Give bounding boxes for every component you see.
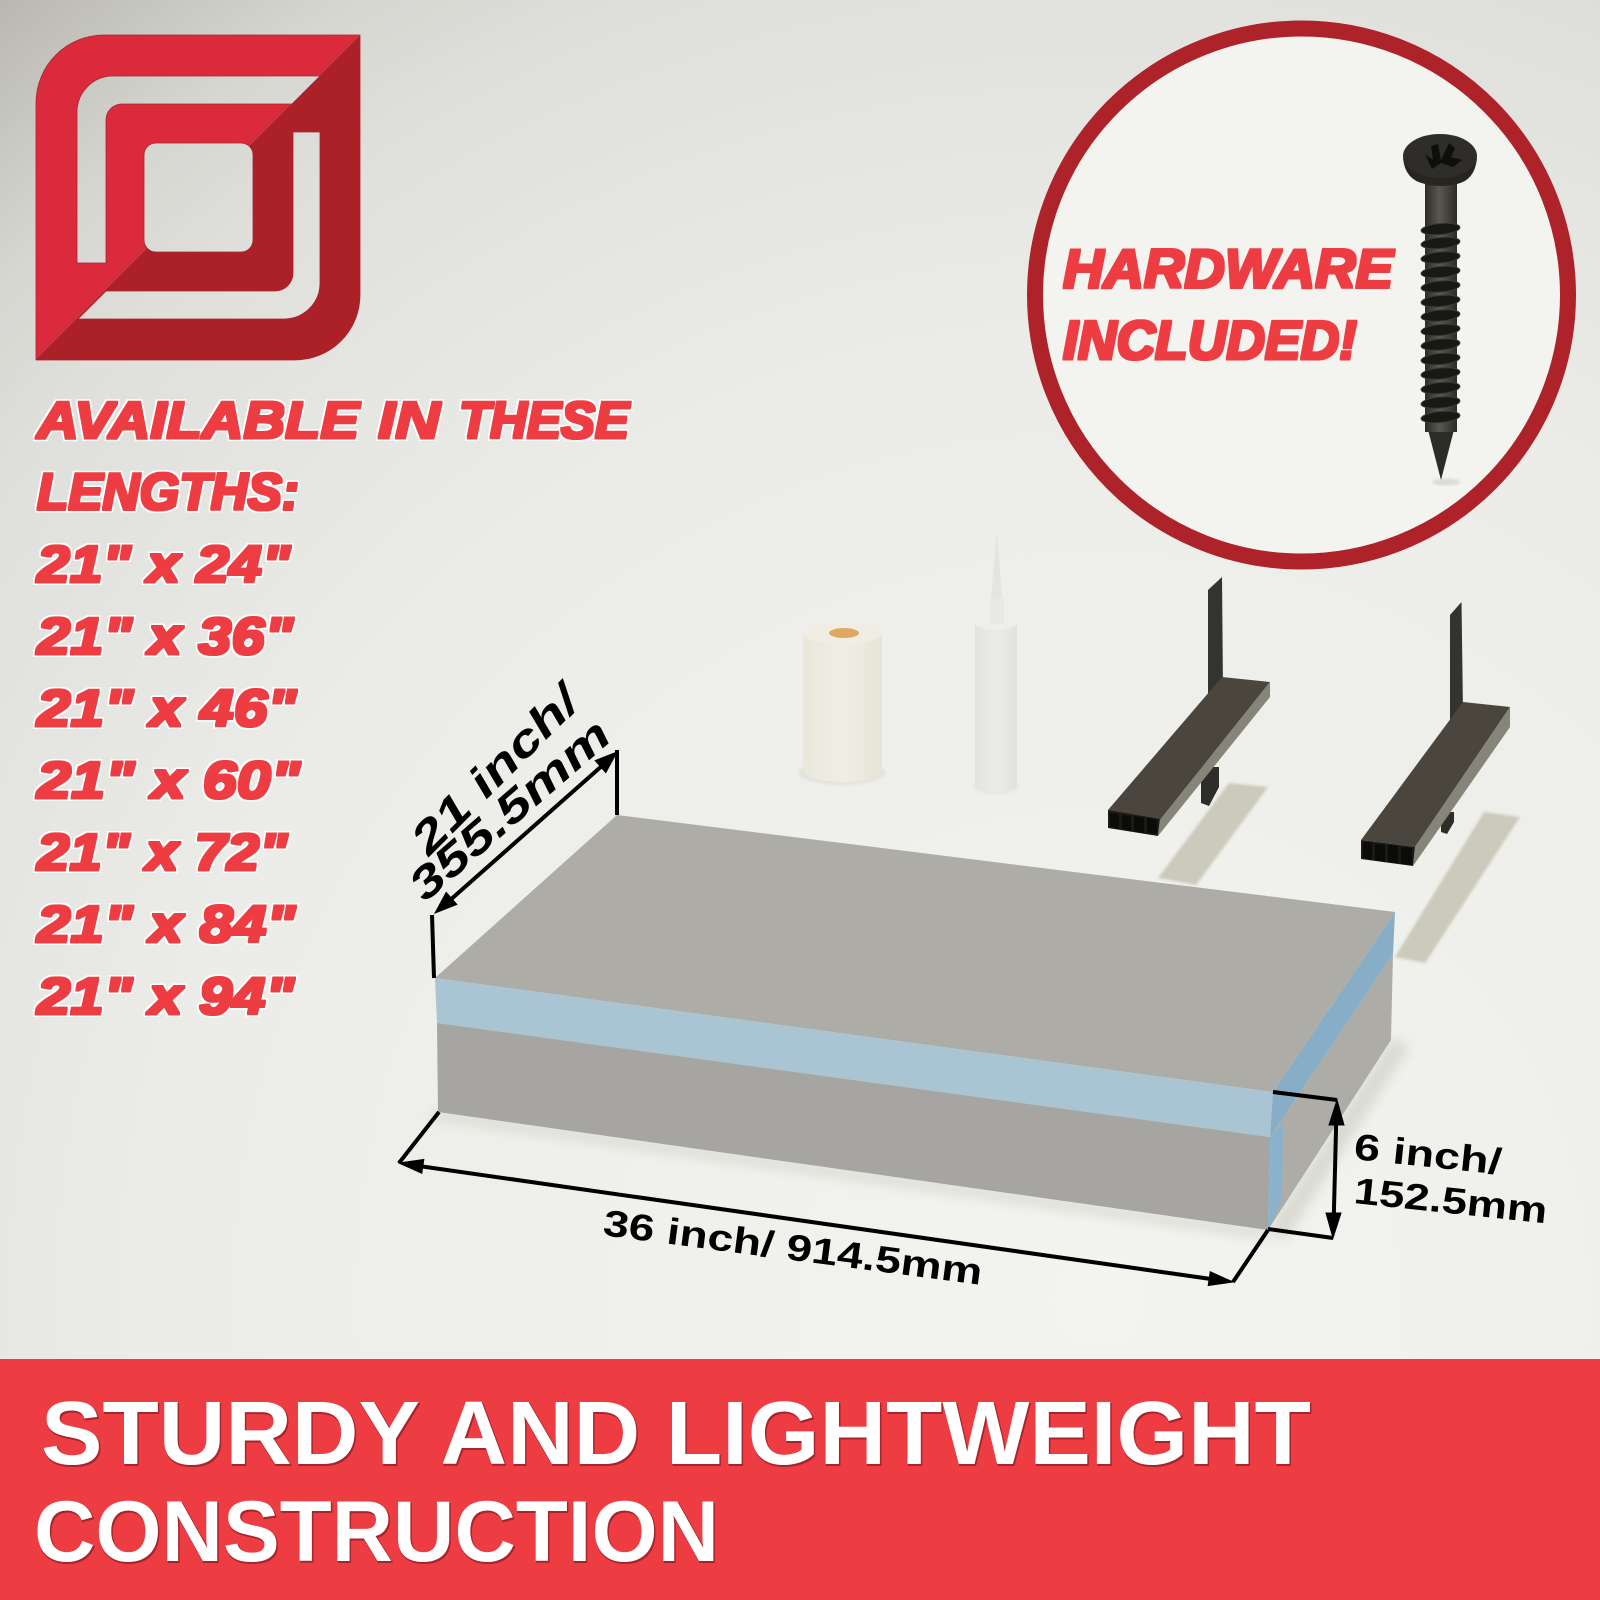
callout ring: [1035, 28, 1568, 562]
bracket shadow left: [1158, 783, 1268, 885]
arrow: height dimension: [1268, 1092, 1344, 1238]
label: height: 6 inch/: [1352, 1126, 1504, 1182]
arrow: width dimension: [432, 750, 617, 978]
logo: [36, 35, 360, 360]
arrow: length dimension: [399, 1112, 1268, 1286]
bracket shadow right: [1395, 812, 1520, 963]
heading: available in these lengths: [35, 392, 630, 522]
label: width: 355.5mm: [399, 710, 620, 911]
board blue layer front: [435, 978, 1273, 1137]
available lengths list: [35, 392, 630, 1026]
board top face: [435, 815, 1395, 1092]
callout text: [1063, 238, 1395, 371]
size options: 21" x 94": [36, 968, 296, 1026]
heading: available in these lengths: LENGTHS:: [37, 464, 299, 522]
size options: 21" x 60": [36, 752, 302, 810]
label: width: 21 inch/: [400, 672, 593, 865]
callout: hardware included: [1035, 28, 1568, 562]
size options: 21" x 24": [36, 536, 292, 594]
dimension: length 36 inch: [399, 1112, 1268, 1293]
dimension: width 21 inch: [399, 672, 620, 978]
banner title: STURDY AND LIGHTWEIGHT: [41, 1384, 1311, 1484]
heading: available in these lengths: AVAILABLE: [35, 392, 360, 450]
callout text: INCLUDED!: [1063, 309, 1357, 371]
size options: 21" x 36": [36, 608, 295, 666]
size options: 21" x 72": [36, 824, 288, 882]
label: length: 36 inch/ 914.5mm: [601, 1202, 985, 1293]
size options: 21" x 46": [36, 680, 298, 738]
icon: right bracket: [1361, 602, 1510, 866]
label: height: 152.5mm: [1352, 1170, 1549, 1231]
board grey side: [1268, 954, 1393, 1230]
board blue strip: [1268, 1122, 1283, 1230]
banner title: [34, 1384, 1311, 1580]
banner: [0, 1359, 1600, 1600]
icon: left bracket: [1108, 577, 1270, 836]
board grey front: [437, 1023, 1270, 1230]
banner title: CONSTRUCTION: [34, 1484, 719, 1580]
heading: available in these lengths: THESE: [459, 392, 630, 450]
size options: 21" x 84": [36, 896, 297, 954]
label: width: [399, 672, 620, 911]
callout text: HARDWARE: [1063, 238, 1395, 300]
panel: construction board: [430, 815, 1410, 1240]
icon: screw: [1403, 134, 1477, 486]
board blue layer side: [1270, 912, 1395, 1137]
icon: tape roll: [798, 622, 886, 785]
icon: sealant tube: [972, 530, 1020, 794]
dimension: height 6 inch: [1268, 1092, 1549, 1238]
heading: available in these lengths: IN: [378, 392, 442, 450]
label: height: [1352, 1126, 1549, 1231]
size options: [36, 536, 302, 1026]
